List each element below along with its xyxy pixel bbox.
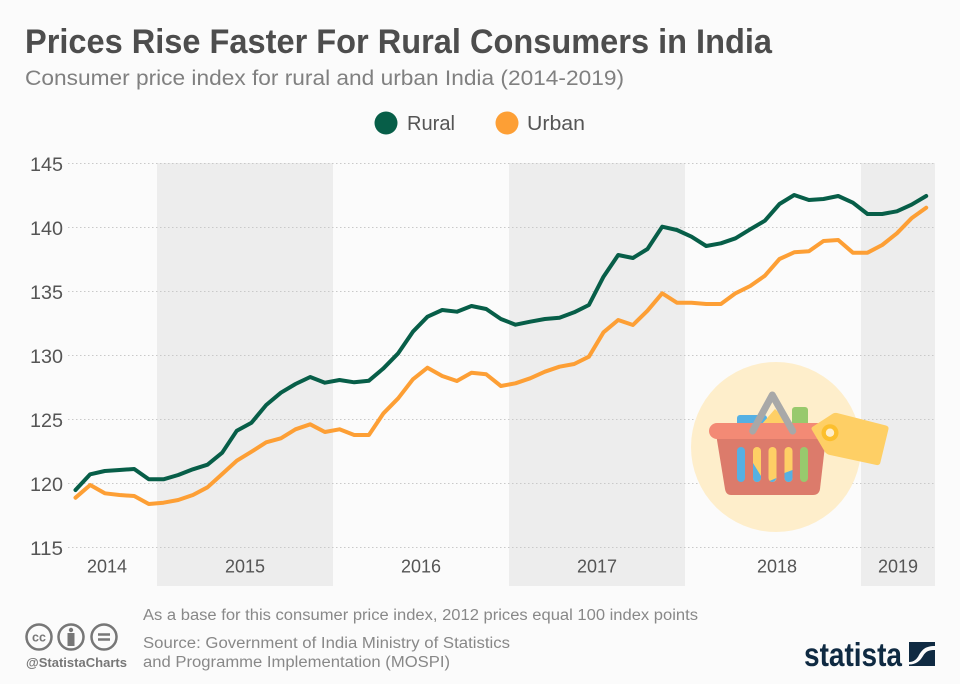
y axis labels: 130: [30, 346, 63, 368]
logo: statista: statista: [804, 636, 903, 673]
icon: creative commons licence: [26, 624, 116, 650]
year bands: [157, 163, 935, 586]
icon: shopping basket with price tag: [691, 362, 889, 532]
x axis labels: 2018: [757, 556, 797, 576]
legend: urban: [496, 112, 585, 135]
y axis labels: 140: [30, 218, 63, 240]
legend: urban: Urban: [527, 113, 585, 135]
line: rural: [76, 195, 926, 490]
x axis labels: 2015: [225, 556, 265, 576]
y axis labels: 115: [30, 538, 63, 560]
x axis labels: 2014: [87, 556, 127, 576]
x axis labels: 2016: [401, 556, 441, 576]
source: and Programme Implementation (MOSPI): [143, 654, 450, 671]
y axis labels: 145: [30, 154, 63, 176]
social handle: @StatistaCharts: [26, 656, 127, 670]
y axis labels: 125: [30, 410, 63, 432]
subtitle: Consumer price index for rural and urban India (2014-2019): [25, 67, 624, 90]
icon: creative commons licence: cc: [32, 630, 46, 644]
x axis labels: 2019: [878, 556, 918, 576]
legend: rural: Rural: [407, 113, 455, 135]
source: [143, 635, 510, 671]
source: Source: Government of India Ministry of Statistics: [143, 635, 510, 652]
title: Prices Rise Faster For Rural Consumers in India: [25, 23, 773, 61]
x axis labels: 2017: [577, 556, 617, 576]
line: urban: [76, 208, 926, 504]
footnote: As a base for this consumer price index, 2012 prices equal 100 index points: [143, 607, 698, 624]
y axis labels: 120: [30, 474, 63, 496]
x axis labels: [87, 556, 918, 576]
legend: [374, 112, 585, 135]
y axis labels: 135: [30, 282, 63, 304]
y axis labels: [30, 154, 63, 560]
legend: rural: [374, 112, 455, 135]
